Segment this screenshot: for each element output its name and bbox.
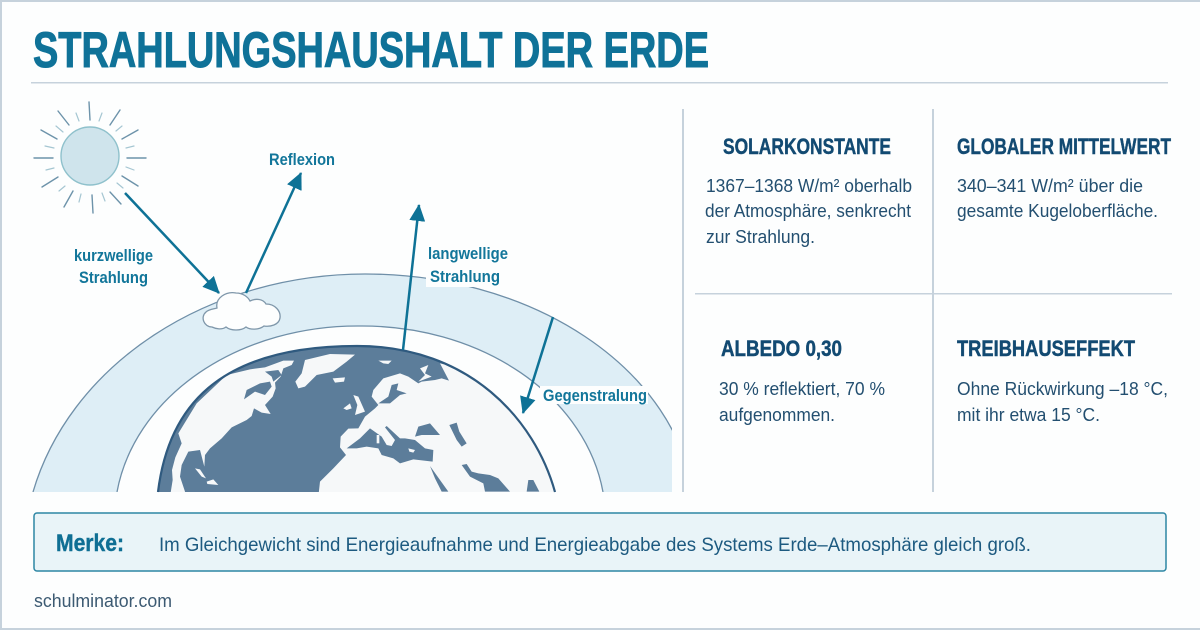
card: Albedo: ALBEDO 0,30 [721,336,842,361]
card: Globaler Mittelwert [957,134,1171,221]
label: langwellige Strahlung: Strahlung [430,268,500,286]
callout: Merke: Im Gleichgewicht sind Energieaufnahme und Energieabgabe des Systems Erde–Atmosphäre gleich groß. [159,534,1031,556]
label: langwellige Strahlung: langwellige [428,245,508,263]
card: Treibhauseffekt [957,336,1168,425]
label: Reflexion: Reflexion [269,151,335,169]
card: Albedo [719,336,885,425]
card: Albedo: 30 % reflektiert, 70 % [719,378,885,399]
globe [156,344,556,492]
card: Solarkonstante [705,134,912,247]
panel: key figures [682,109,1172,492]
card: Treibhauseffekt: TREIBHAUSEFFEKT [957,336,1135,361]
arrow: incoming short-wave radiation [125,193,219,293]
arrow: long-wave radiation [403,205,419,350]
label: kurzwellige Strahlung [74,247,153,287]
callout: Merke: Merke: [56,530,124,557]
panel: diagram of radiation budget [33,102,693,507]
card: Solarkonstante: SOLARKONSTANTE [723,134,891,159]
card: Globaler Mittelwert: 340–341 W/m² über die [957,175,1143,196]
icon: sun [34,102,146,213]
label: kurzwellige Strahlung: Strahlung [79,269,148,287]
callout: Merke [34,513,1166,571]
card: Globaler Mittelwert: gesamte Kugeloberfläche. [957,200,1158,221]
title: STRAHLUNGSHAUSHALT DER ERDE [33,22,709,78]
label: langwellige Strahlung [426,245,508,287]
label: kurzwellige Strahlung: kurzwellige [74,247,153,265]
footer source: schulminator.com [34,591,172,611]
card: Treibhauseffekt: Ohne Rückwirkung –18 °C, [957,378,1168,399]
label: Gegenstralung: Gegenstralung [543,387,647,405]
card: Treibhauseffekt: mit ihr etwa 15 °C. [957,404,1100,425]
card: Solarkonstante: 1367–1368 W/m² oberhalb [706,175,912,196]
atmosphere band [33,274,693,492]
card: Solarkonstante: der Atmosphäre, senkrecht [705,200,911,221]
arrow: reflection [246,173,301,293]
icon: cloud [203,293,280,330]
card: Solarkonstante: zur Strahlung. [706,226,815,247]
arrow: back radiation [523,317,553,413]
card: Albedo: aufgenommen. [719,404,835,425]
